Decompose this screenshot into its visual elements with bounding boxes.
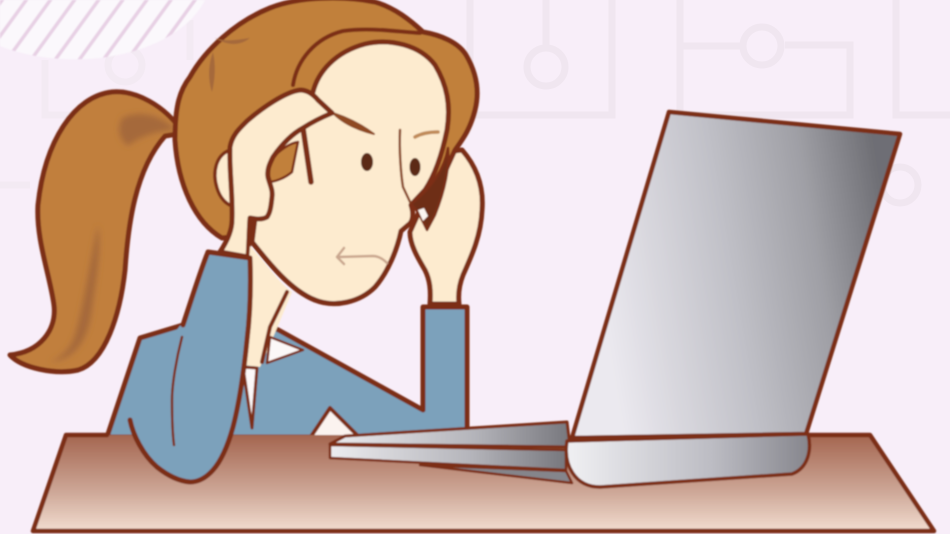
hair <box>175 0 477 238</box>
neck right edge <box>262 292 287 362</box>
shirt front <box>243 367 257 428</box>
ponytail shading <box>50 114 176 362</box>
blue jacket body <box>107 307 467 437</box>
right eye <box>410 158 420 176</box>
laptop <box>330 112 900 487</box>
nose line <box>400 130 411 204</box>
hair behind left hand <box>268 142 298 182</box>
neck over jacket <box>243 246 292 367</box>
hair parting line <box>293 29 420 85</box>
mouth <box>337 248 387 264</box>
left hand at temple <box>220 90 332 257</box>
sleeve crease <box>172 337 182 445</box>
desk outline <box>33 435 934 531</box>
left eye <box>361 153 373 171</box>
background circuit pattern <box>0 0 950 203</box>
laptop screen <box>572 112 900 438</box>
left eyebrow <box>333 113 374 134</box>
right eyebrow <box>415 132 438 137</box>
hatched corner patch <box>0 0 205 59</box>
chin edge <box>252 242 315 300</box>
left forearm sleeve <box>129 252 250 482</box>
hair lock <box>303 128 311 182</box>
shirt collar <box>243 337 303 428</box>
face <box>252 42 448 304</box>
ponytail <box>10 92 183 372</box>
sleeve outline <box>130 252 250 482</box>
phone against ear <box>411 148 448 230</box>
gap under arm <box>310 408 360 438</box>
laptop hinge <box>566 434 809 487</box>
desk <box>33 435 934 531</box>
right hand <box>410 150 482 304</box>
ear <box>215 150 232 206</box>
hair shading <box>209 38 250 92</box>
laptop base <box>330 422 572 483</box>
